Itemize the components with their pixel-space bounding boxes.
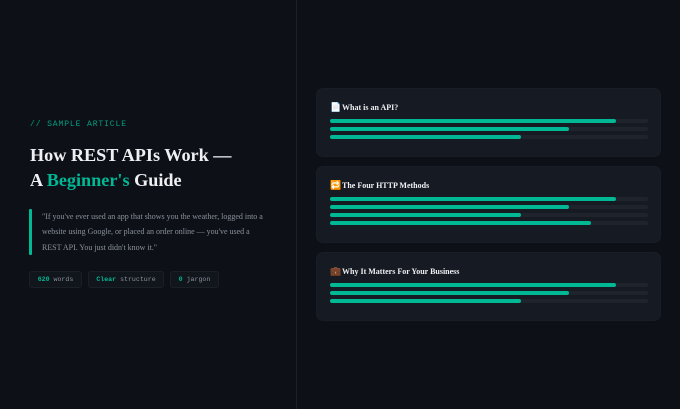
bar 2 bbox=[330, 127, 648, 131]
stat chip: words: 620 words bbox=[38, 276, 73, 283]
heading: Why It Matters For Your Business: 💼 bbox=[330, 266, 341, 276]
eyebrow label: // SAMPLE ARTICLE bbox=[30, 120, 127, 129]
heading: The Four HTTP Methods: 🔁 bbox=[330, 180, 341, 190]
heading: What is an API: What is an API? bbox=[342, 103, 398, 112]
heading: Why It Matters For Your Business: Why It Matters For Your Business bbox=[342, 267, 459, 276]
quote text: website using Google, or placed an order online — you've used a bbox=[42, 227, 250, 236]
bar 3 bbox=[330, 135, 648, 139]
stat chip: jargon bbox=[170, 271, 219, 288]
stat chip: jargon: 0 jargon bbox=[179, 276, 210, 283]
title: How REST APIs Work — bbox=[30, 145, 231, 165]
bar 1 bbox=[330, 197, 648, 201]
bar 4 bbox=[330, 221, 648, 225]
quote text bbox=[42, 212, 263, 252]
stat chip: words bbox=[29, 271, 82, 288]
panel: Why It Matters For Your Business bbox=[316, 252, 661, 321]
heading: What is an API: 📄 bbox=[330, 102, 341, 112]
stat chip: structure: Clear structure bbox=[96, 276, 156, 283]
title: A Beginner's Guide bbox=[30, 170, 182, 190]
bar 3 bbox=[330, 213, 648, 217]
bar 1 bbox=[330, 119, 648, 123]
title bbox=[30, 145, 232, 190]
panel: The Four HTTP Methods bbox=[316, 166, 661, 243]
left panel bbox=[0, 0, 297, 409]
quote text: "If you've ever used an app that shows you the weather, logged into a bbox=[42, 212, 263, 221]
bar 2 bbox=[330, 291, 648, 295]
quote text: REST API. You just didn't know it." bbox=[42, 243, 157, 252]
bar 1 bbox=[330, 283, 648, 287]
heading: The Four HTTP Methods: The Four HTTP Methods bbox=[342, 181, 429, 190]
bar 2 bbox=[330, 205, 648, 209]
panel: What is an API bbox=[316, 88, 661, 157]
quote accent bar bbox=[29, 209, 32, 255]
bar 3 bbox=[330, 299, 648, 303]
stat chip: structure bbox=[88, 271, 164, 288]
